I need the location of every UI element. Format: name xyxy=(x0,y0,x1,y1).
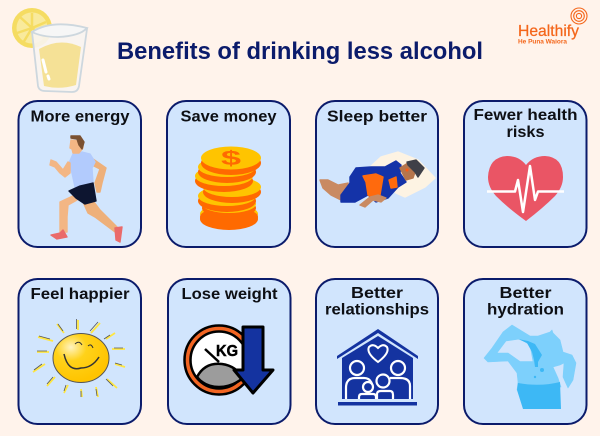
heading: feel happier: Feel happier xyxy=(30,286,130,303)
icon: lemonade glass xyxy=(12,8,87,92)
icon: woman drinking water xyxy=(484,325,576,409)
panel: more energy xyxy=(18,101,141,247)
icon: coin stack xyxy=(195,146,261,230)
heading: sleep better: Sleep better xyxy=(327,108,427,126)
heading: better relationships: Better xyxy=(351,285,403,302)
panel: better hydration: hydration xyxy=(487,302,564,318)
heading: lose weight: Lose weight xyxy=(182,286,278,303)
panel: sleep better xyxy=(316,101,438,247)
icon: sleeping person xyxy=(320,152,435,207)
icon: family in house xyxy=(337,329,418,406)
panel: feel happier xyxy=(18,279,141,424)
icon: coin stack: $ xyxy=(221,148,241,170)
heading: more energy: More energy xyxy=(30,108,130,126)
logo: Healthify: Healthify xyxy=(518,23,579,40)
panel: lose weight xyxy=(168,279,290,424)
icon: heart with pulse xyxy=(487,156,564,221)
title: Benefits of drinking less alcohol xyxy=(117,38,483,65)
heading: save money: Save money xyxy=(180,108,277,126)
icon: runner xyxy=(50,136,122,242)
panel: fewer health risks: risks xyxy=(506,124,545,141)
panel: better relationships xyxy=(316,279,438,424)
heading: fewer health risks: Fewer health xyxy=(474,107,578,124)
panel: save money xyxy=(167,101,290,247)
panel: better relationships: relationships xyxy=(325,302,429,318)
icon: smiling sun xyxy=(33,319,125,397)
panel: fewer health risks xyxy=(464,101,586,247)
icon: scale with down arrow: KG xyxy=(216,343,238,360)
icon: scale with down arrow xyxy=(184,326,273,394)
heading: better hydration: Better xyxy=(500,285,552,302)
panel: better hydration xyxy=(464,279,586,424)
logo: Healthify: He Puna Waiora xyxy=(518,38,568,46)
logo: Healthify xyxy=(518,8,587,46)
